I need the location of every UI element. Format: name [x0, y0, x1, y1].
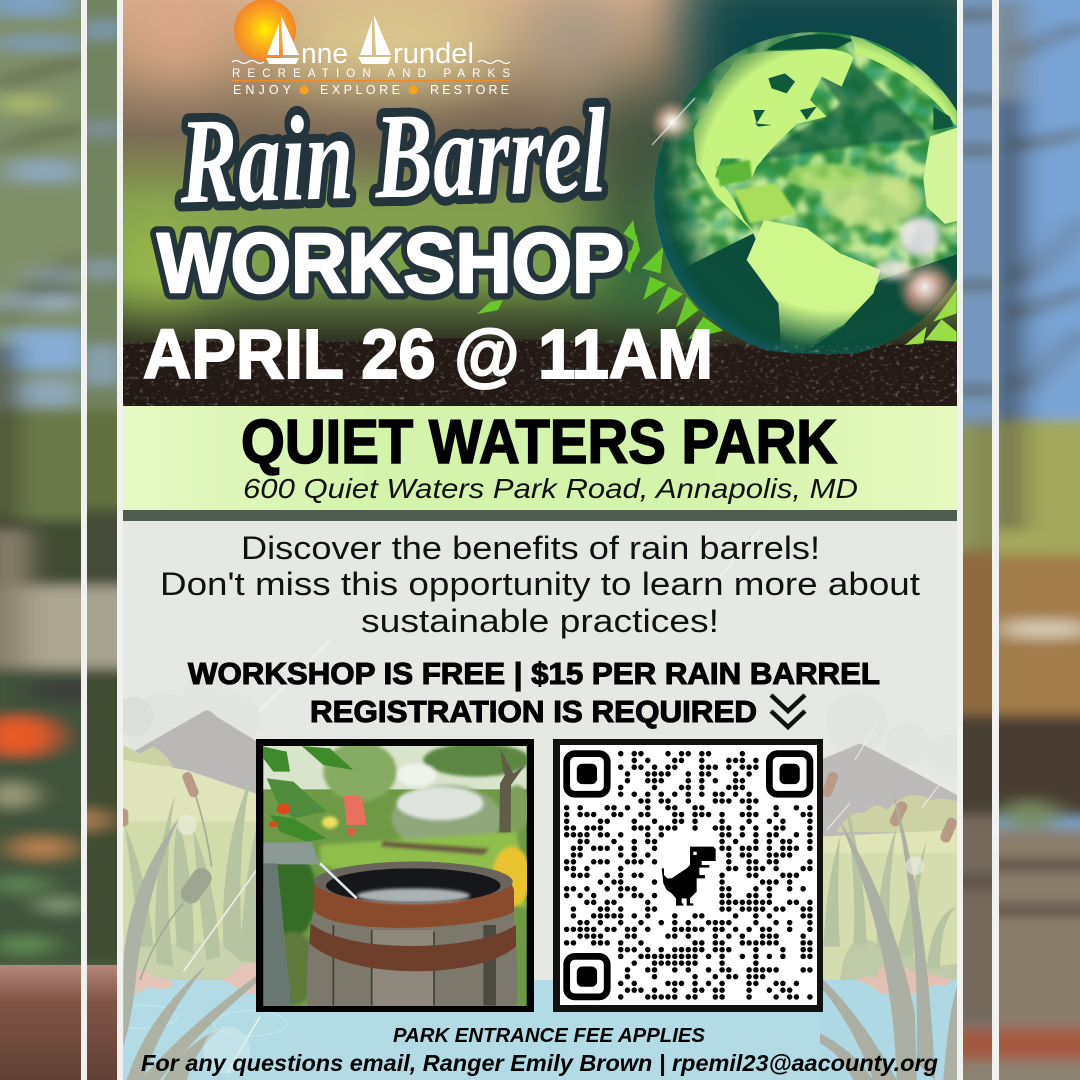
logo: Anne Arundel Recreation and Parks: RECREATION AND PARKS [232, 68, 510, 80]
icon: double chevron down [771, 695, 805, 727]
icon: pixel dinosaur [662, 847, 716, 906]
qr dots [567, 754, 810, 997]
illustration: left landscape [123, 697, 287, 1080]
soil foreground [710, 344, 948, 358]
text: address: 600 Quiet Waters Park Road, Annapolis, MD [243, 473, 858, 504]
blurred photo strip: inner left [87, 0, 117, 1080]
icon: sailboats [266, 15, 391, 64]
text: intro paragraph: Discover the benefits of rain barrels! [241, 530, 820, 566]
heading: park name: QUIET WATERS PARK [241, 408, 837, 477]
panel: location band [123, 406, 957, 521]
text: pricing [188, 656, 880, 729]
text: intro paragraph [160, 530, 920, 639]
blurred photo strip: far left [0, 0, 81, 1080]
logo: Anne Arundel Recreation and Parks: rundel [393, 38, 474, 70]
text: intro paragraph: sustainable practices! [361, 603, 719, 639]
icon: green globe [650, 30, 980, 360]
icon: fern leaves [477, 220, 957, 345]
text: pricing: WORKSHOP IS FREE | $15 PER RAIN BARREL [188, 656, 880, 691]
date and time: APRIL 26 @ 11AM [143, 315, 713, 393]
icon: sun [234, 0, 296, 61]
QR code [553, 739, 823, 1012]
logo: Anne Arundel Recreation and Parks: nne [301, 38, 348, 70]
logo: Anne Arundel Recreation and Parks: RESTORE [430, 83, 509, 97]
illustration: right landscape [820, 744, 957, 1080]
panel: details background illustration [103, 521, 967, 1080]
title: Workshop: WORKSHOP [157, 216, 624, 310]
text: intro paragraph: Don't miss this opportunity to learn more about [160, 566, 920, 602]
text: footer: For any questions email, Ranger Emily Brown | rpemil23@aacounty.org [141, 1050, 938, 1076]
blurred photo strip: far right [999, 0, 1080, 1080]
text: pricing: REGISTRATION IS REQUIRED [310, 694, 757, 729]
qr finder patterns [567, 754, 810, 997]
title: Workshop: WORKSHOP [157, 216, 624, 310]
blurred photo strip: inner right [963, 0, 992, 1080]
panel: hero banner [110, 0, 1000, 406]
barrel body [307, 908, 517, 1006]
logo: Anne Arundel Recreation and Parks [232, 0, 510, 97]
logo: Anne Arundel Recreation and Parks: ENJOY [233, 83, 292, 97]
text: footer: PARK ENTRANCE FEE APPLIES [393, 1025, 706, 1047]
title: Rain Barrel: Rain Barrel [178, 83, 608, 229]
photo: rain barrel [256, 739, 534, 1012]
logo: Anne Arundel Recreation and Parks: EXPLORE [320, 83, 400, 97]
text: footer [141, 1025, 938, 1076]
soil [123, 338, 957, 406]
